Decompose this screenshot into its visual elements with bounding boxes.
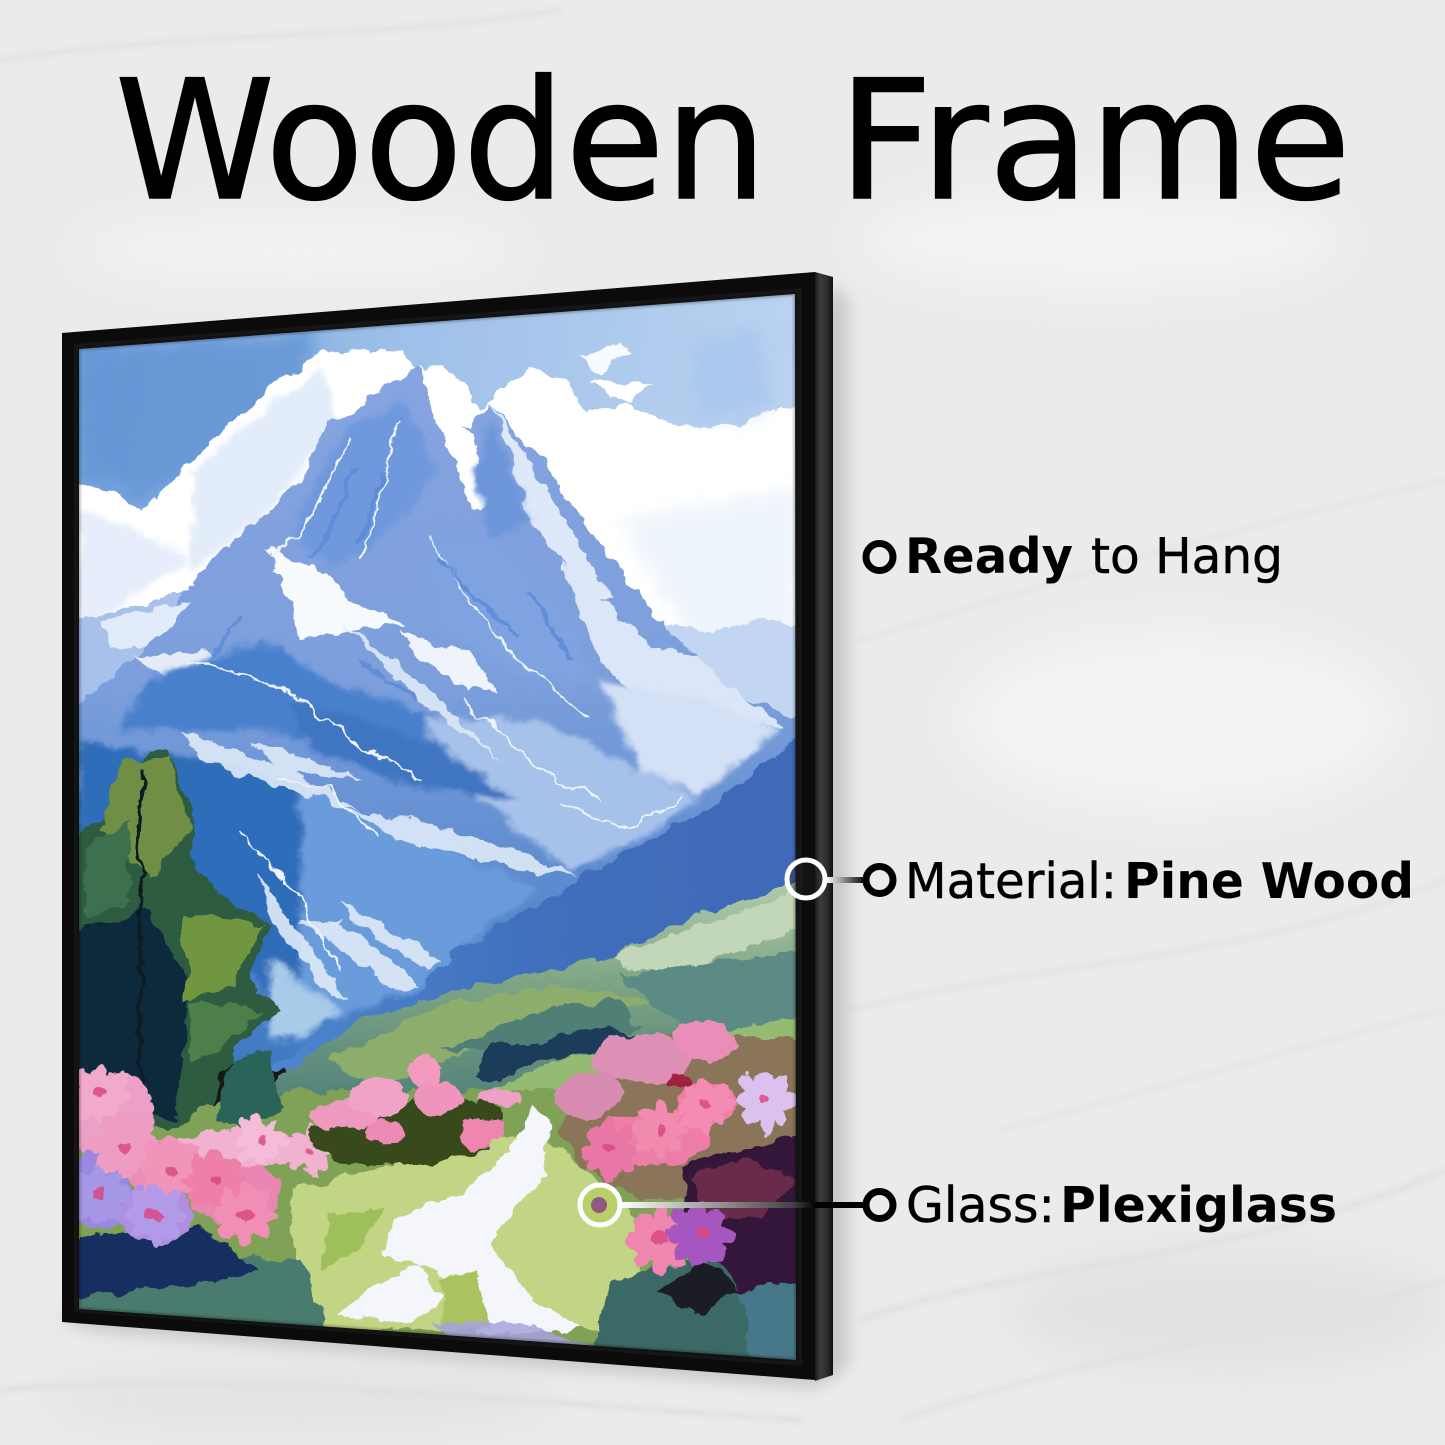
snow streaks <box>180 620 580 1000</box>
callout: Glass Plexiglass: Plexiglass <box>1060 1177 1337 1234</box>
sky <box>79 294 796 510</box>
frame inner lip <box>74 288 802 1366</box>
distant trees <box>470 1028 640 1078</box>
title: Wooden <box>115 45 767 237</box>
painting <box>79 294 796 1360</box>
inner shadow of frame <box>79 294 796 1360</box>
green hills <box>274 882 796 1096</box>
callout: Ready to Hang <box>866 528 1283 585</box>
clouds <box>79 342 796 632</box>
left flowers <box>60 1062 335 1300</box>
meadow base <box>79 1086 689 1346</box>
callout: Ready to Hang: to Hang <box>1091 528 1283 585</box>
right flowers <box>556 1020 810 1365</box>
mountain lit flanks <box>100 365 785 740</box>
callout: Glass Plexiglass: Glass: <box>906 1177 1055 1234</box>
frame front <box>62 272 815 1380</box>
frame side <box>815 272 833 1381</box>
title <box>115 45 1351 237</box>
title: Frame <box>838 45 1351 237</box>
callout: Material Pine Wood <box>787 853 1414 910</box>
middle flowers <box>305 1055 522 1165</box>
callout: Material Pine Wood: Material: <box>905 853 1117 910</box>
distant left range <box>79 592 183 704</box>
mountain shading <box>79 400 780 1040</box>
callout: Glass Plexiglass <box>580 1177 1337 1234</box>
pine tree <box>60 750 285 1130</box>
far ridge <box>270 725 810 1080</box>
path <box>340 1104 579 1335</box>
callout: Ready to Hang: Ready <box>905 528 1073 585</box>
main mountain <box>60 365 810 1070</box>
distant right range <box>664 618 796 718</box>
framed picture <box>50 265 848 1388</box>
frame shadow on wall <box>62 285 848 1388</box>
callout: Material Pine Wood: Pine Wood <box>1124 853 1414 910</box>
